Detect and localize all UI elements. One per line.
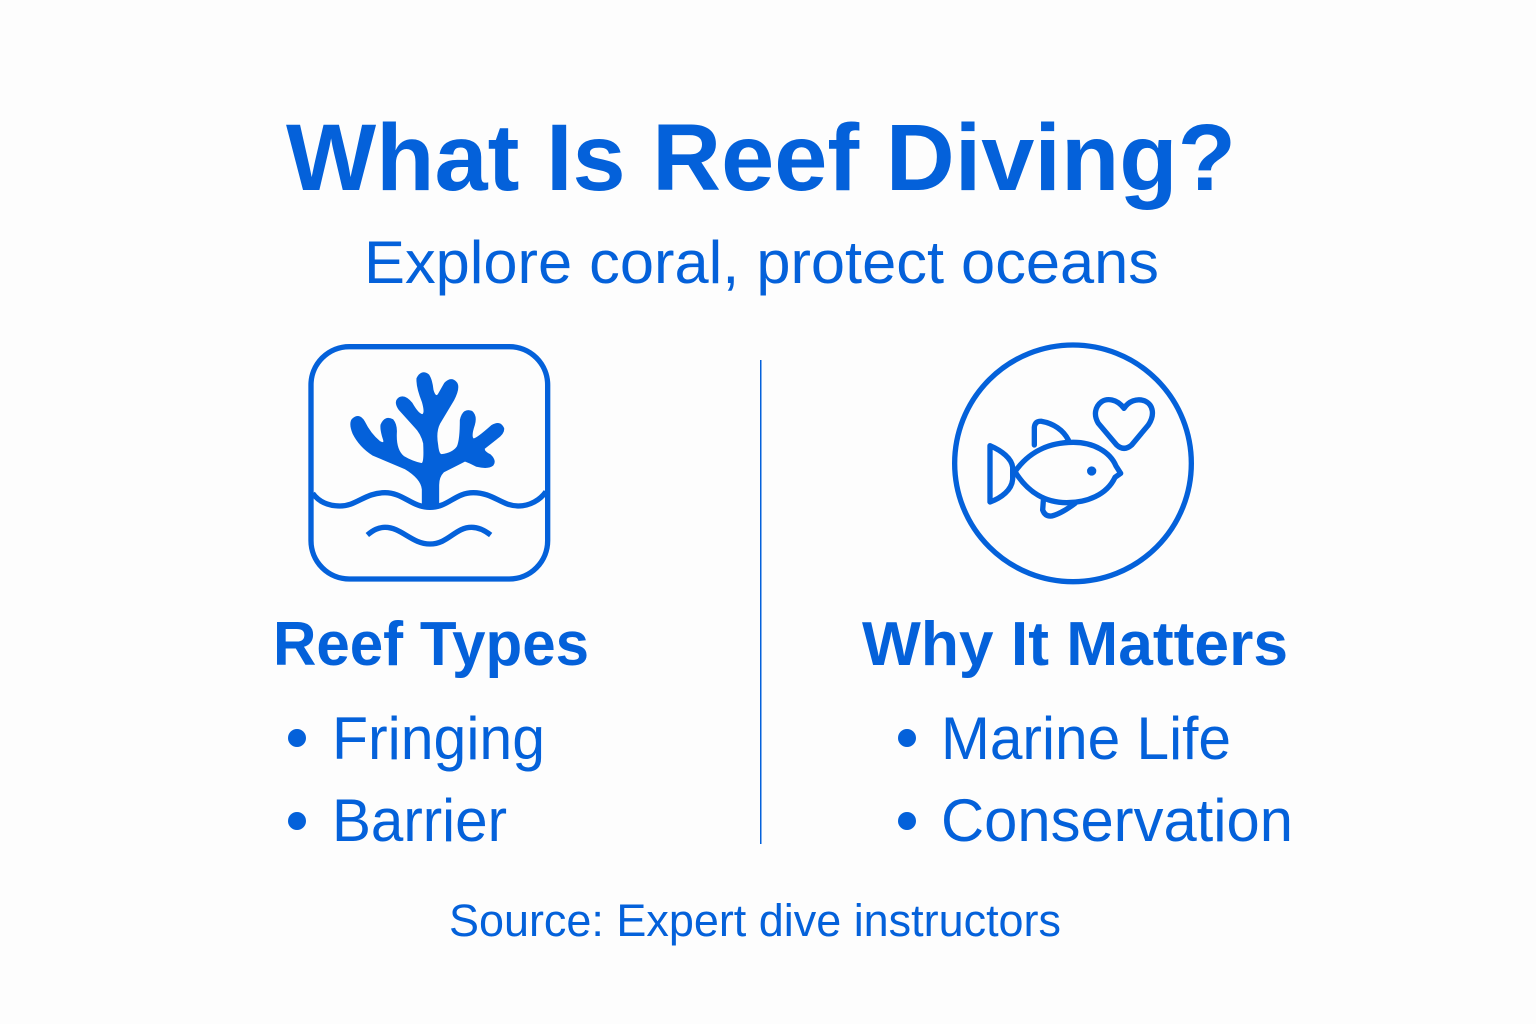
source note: Source: Expert dive instructors [449,895,1061,946]
list: why it matters [898,705,1293,854]
list: reef types: Fringing [332,705,545,772]
heading: Reef Types: Reef Types [273,610,589,679]
divider [760,360,762,844]
list: reef types: Barrier [332,787,507,854]
subtitle: Explore coral, protect oceans [364,229,1159,296]
list: why it matters: Marine Life [941,705,1231,772]
icon: coral reef in rounded square [311,347,548,579]
title: What Is Reef Diving? [286,105,1236,211]
list: why it matters: Conservation [941,787,1293,854]
list: reef types [288,705,545,854]
heading: Why It Matters: Why It Matters [862,610,1288,679]
icon: fish with heart in circle [955,345,1191,582]
